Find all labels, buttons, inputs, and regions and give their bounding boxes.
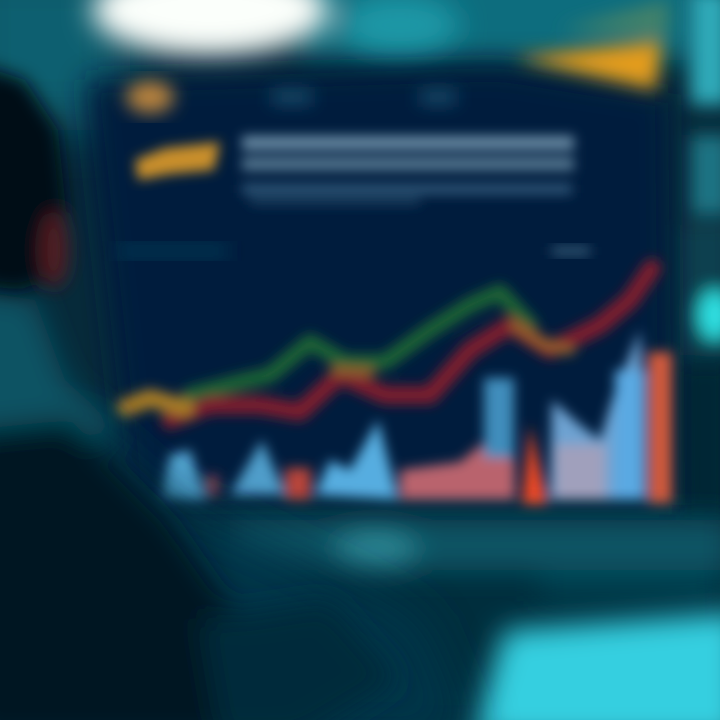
person silhouette — [0, 65, 470, 720]
bright cyan foreground light — [470, 612, 720, 720]
bar chart — [160, 330, 672, 505]
top navigation marks — [126, 81, 456, 113]
desk and bottom reflections — [230, 520, 720, 597]
right edge light strip — [680, 0, 720, 515]
heading text block — [242, 136, 574, 204]
ceiling light — [92, 0, 460, 56]
left side caption — [118, 245, 228, 257]
small label top right of chart — [552, 246, 590, 256]
screen panel — [85, 68, 672, 505]
orange corner triangle — [515, 0, 668, 90]
logo mark — [135, 142, 220, 180]
line chart: green, red and orange series — [125, 268, 652, 420]
